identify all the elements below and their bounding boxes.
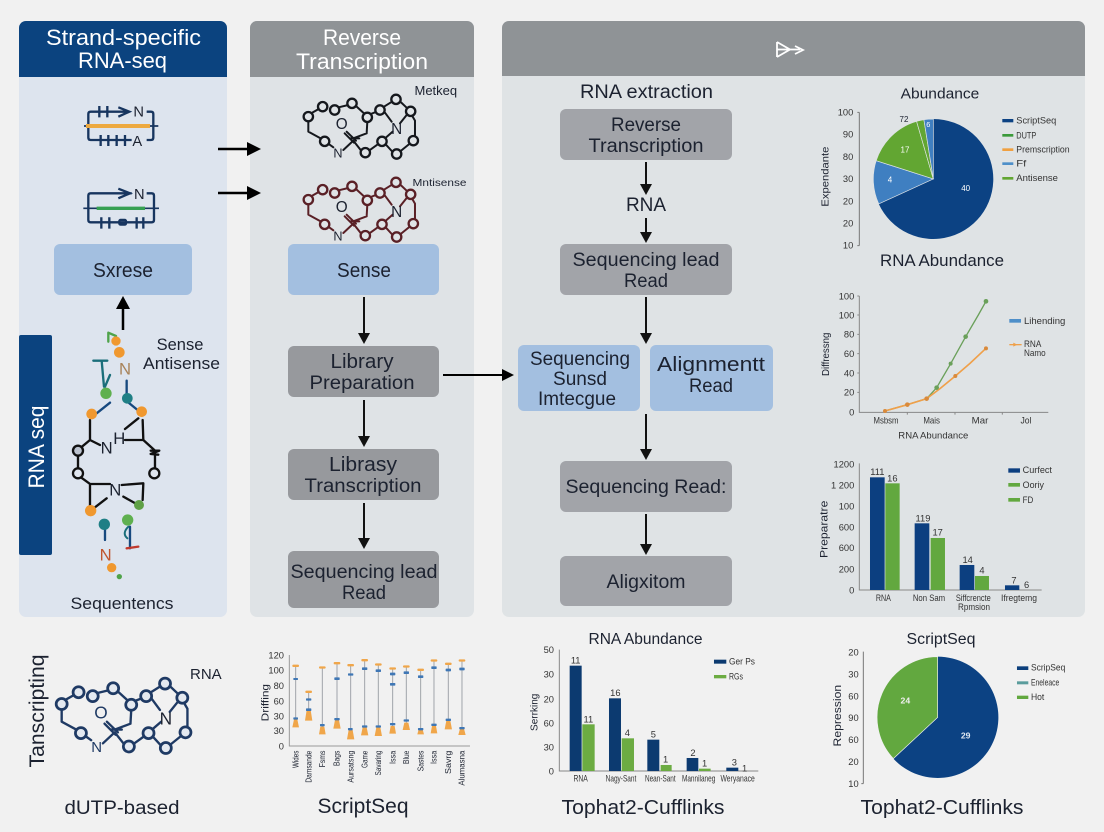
chart: preparation bar chart: 16 (887, 473, 898, 483)
chart: grouped bars: 1 (702, 759, 707, 769)
label: sense antisense (143, 336, 220, 373)
label: metkeq: Metkeq (414, 83, 457, 98)
label: Tophat2-Cufflinks: Tophat2-Cufflinks (562, 797, 724, 819)
chart: preparation bar chart: 17 (932, 528, 943, 538)
chart: range plot: Savrg (444, 751, 453, 774)
icon: sense strand diagram: N (133, 105, 144, 121)
box: sequencing sunsd integue (518, 345, 640, 411)
box: librasy transcription: Librasy (329, 454, 397, 476)
heading: ScriptSeq: ScriptSeq (906, 631, 976, 648)
chart: range plot: Alumasna (458, 750, 467, 786)
chart: preparation bar chart: 600 (839, 543, 854, 553)
chart: preparation bar chart: Ooriy (1023, 480, 1044, 490)
icon: navy ring molecule (56, 678, 191, 756)
chart: grouped bars: 0 (549, 767, 554, 777)
chart: preparation bar chart: 6 (1024, 580, 1029, 590)
arrow: reverse transcription to RNA (640, 162, 652, 195)
chart: preparation bar chart: 7 (1011, 575, 1017, 585)
chart: preparation bar chart: 111 (870, 467, 884, 477)
chart: grouped bars: 30 (544, 743, 554, 753)
label: transcripting: Tanscriptinq (26, 654, 49, 768)
box: sequencing sunsd integue: Imtecgue (538, 389, 616, 410)
label: RNA: RNA (626, 195, 666, 216)
chart: expression pie: ScripSeq (1031, 663, 1065, 673)
chart: abundance pie: 72 (900, 115, 909, 124)
chart: grouped bars: 11 (571, 656, 581, 666)
panel: reverse transcription (250, 21, 474, 617)
box: sequencing lead read (288, 551, 439, 608)
chart: preparation bar chart: Preparatre (818, 501, 830, 558)
arrow: sequencing to alignment row (640, 297, 652, 344)
chart: range plot: Game (360, 750, 369, 768)
chart: grouped bars: Ger Ps (729, 656, 755, 666)
arrow: sequencing read to alignment (640, 514, 652, 555)
chart: preparation bar chart (818, 459, 1052, 612)
chart: range plot: 30 (274, 726, 284, 736)
side tab: RNA seq (19, 335, 52, 555)
chart: preparation bar chart: 4 (979, 566, 985, 576)
chart: grouped bars: 1 (663, 755, 668, 765)
box: aligxitom (560, 556, 732, 606)
arrow: alignment row to sequencing read (640, 414, 652, 460)
heading: strand-specific RNA-seq: Strand-specific (46, 25, 201, 50)
chart: abundance pie: 4 (888, 176, 893, 185)
box: sequencing lead read: Sequencing lead (572, 250, 720, 271)
chart: grouped bars: 2 (690, 748, 696, 758)
chart: grouped bars: 1 (742, 763, 747, 773)
chart: range plot: Issa (430, 750, 439, 764)
chart: abundance pie: 20 (843, 196, 853, 206)
box: sequencing lead read: Sequencing lead (290, 562, 438, 583)
chart: line chart: Namo (1024, 348, 1046, 358)
chart: expression pie: 10 (848, 779, 859, 789)
chart: range plot: Issa (388, 750, 397, 764)
chart: expression pie (832, 648, 1065, 789)
chart: grouped bars: RGs (729, 671, 743, 681)
heading: strand-specific RNA-seq (19, 21, 227, 77)
box: librasy transcription: Transcription (304, 476, 422, 497)
chart: range plot: 100 (268, 666, 284, 676)
label: Tophat2-Cufflinks: Tophat2-Cufflinks (860, 797, 1024, 819)
heading: RNA abundance: RNA Abundance (588, 631, 702, 648)
chart: range plot: Savaring (374, 751, 383, 775)
chart: line chart: 40 (844, 368, 854, 378)
chart: range plot: 0 (279, 741, 284, 751)
icon: RNA hairpin molecule: N (101, 438, 113, 457)
icon: RNA hairpin molecule: N (119, 359, 131, 378)
box: alignment read: Read (689, 376, 733, 397)
icon: maroon ring molecule: O (336, 199, 348, 216)
icon: header glyph (777, 42, 803, 57)
label: mntisense: Mntisense (412, 177, 467, 189)
chart: preparation bar chart: RNA (876, 593, 891, 603)
chart: grouped bars: Nean-Sant (645, 773, 676, 783)
chart: preparation bar chart: 200 (839, 565, 854, 575)
chart: abundance pie: DUTP (1016, 130, 1036, 140)
chart: expression pie: 90 (848, 713, 859, 723)
arrow: RNA to sequencing (640, 218, 652, 243)
chart: line chart: Mais (923, 416, 940, 426)
box: sequencing read (560, 461, 732, 512)
chart: grouped bars: 5 (651, 729, 656, 739)
box: sequencing read: Sequencing Read: (566, 477, 726, 498)
arrow: sense to library preparation (358, 297, 370, 344)
chart: line chart: 100 (839, 291, 854, 301)
chart: grouped bars: 30 (544, 670, 554, 680)
bottom item: ScriptSeq range chart (260, 650, 470, 818)
chart: abundance pie: Premscription (1016, 144, 1070, 154)
panel: strand-specific RNA-seq (19, 21, 227, 617)
box: Sxrese: Sxrese (93, 260, 153, 282)
chart: abundance pie: 30 (843, 174, 853, 184)
chart: expression pie: Repression (832, 685, 844, 746)
box: alignment read: Alignmentt (657, 354, 765, 376)
chart: preparation bar chart: Siffcrencte (956, 593, 991, 603)
chart: preparation bar chart: 600 (839, 523, 854, 533)
chart: abundance pie (820, 86, 1070, 251)
side tab: RNA seq: RNA seq (24, 406, 49, 488)
box: sequencing lead read: Read (342, 583, 386, 604)
chart: range plot: 80 (274, 681, 284, 691)
chart: expression pie: 30 (848, 670, 859, 680)
bottom item: Tophat2-Cufflinks bar chart (530, 631, 758, 819)
chart: abundance pie: 20 (843, 219, 853, 229)
chart: line chart: Diffressng (821, 333, 832, 376)
box: reverse transcription (560, 109, 732, 160)
label: ScriptSeq: ScriptSeq (318, 795, 408, 818)
chart: range plot: Wides (291, 751, 300, 768)
heading: strand-specific RNA-seq: RNA-seq (78, 48, 167, 73)
box: library preparation: Library (330, 351, 394, 373)
icon: RNA hairpin molecule: N (100, 546, 112, 565)
chart: preparation bar chart: Curfect (1023, 465, 1052, 475)
chart: range plot: Sastes (416, 751, 425, 771)
icon: black ring molecule: O (336, 116, 348, 133)
chart: expression pie: 29 (961, 730, 971, 740)
icon: RNA hairpin molecule (73, 333, 159, 579)
chart: line chart: Msbsm (873, 416, 899, 426)
heading: reverse transcription: Reverse (323, 25, 401, 50)
chart: line chart: 0 (849, 408, 854, 418)
heading: reverse transcription (250, 21, 474, 77)
chart: abundance pie: Ff (1016, 158, 1027, 168)
box: alignment read (650, 345, 773, 411)
box: sense: Sense (337, 260, 391, 282)
box: aligxitom: Aligxitom (606, 572, 686, 593)
box: Sxrese (54, 244, 192, 295)
label: dUTP-based: dUTP-based (64, 798, 180, 819)
icon: sense strand diagram: A (132, 134, 142, 150)
chart: range plot: 60 (274, 696, 284, 706)
chart: abundance pie: Expendante (820, 146, 831, 207)
box: reverse transcription: Transcription (588, 136, 704, 157)
chart: grouped bars (530, 645, 758, 783)
chart: range plot: 30 (274, 711, 284, 721)
chart: line chart: 80 (844, 330, 854, 340)
icon: navy ring molecule: O (94, 703, 108, 723)
label: sense antisense: Sense (157, 336, 203, 354)
arrow: up to Sxrese (116, 296, 130, 330)
arrow: top panel link one (218, 142, 261, 156)
box: librasy transcription (288, 449, 439, 500)
chart: line chart: Lihending (1024, 316, 1065, 326)
box: reverse transcription: Reverse (611, 115, 681, 136)
icon: black ring molecule: N (333, 146, 343, 160)
label: sequentencs: Sequentencs (70, 594, 174, 613)
chart: preparation bar chart: Ifregtemg (1001, 593, 1037, 603)
chart: line chart (821, 291, 1065, 440)
box: sequencing sunsd integue: Sunsd (553, 369, 607, 390)
chart: line chart: Jol (1020, 416, 1031, 426)
chart: grouped bars: Serrking (530, 694, 541, 731)
chart: preparation bar chart: 14 (962, 555, 973, 565)
chart: grouped bars: 11 (583, 714, 593, 724)
chart: preparation bar chart: 1 200 (831, 480, 854, 490)
heading: reverse transcription: Transcription (296, 49, 428, 74)
icon: antisense strand diagram (83, 187, 159, 229)
icon: navy ring molecule: N (160, 708, 172, 728)
chart: expression pie: Eneleace (1031, 677, 1059, 687)
chart: grouped bars: RNA (573, 773, 588, 783)
chart: grouped bars: 4 (625, 728, 630, 738)
chart: range plot: Blue (402, 750, 411, 764)
icon: RNA hairpin molecule: N (109, 481, 121, 500)
box: sequencing lead read (560, 244, 732, 295)
chart: grouped bars: 50 (544, 645, 554, 655)
chart: preparation bar chart: 0 (849, 586, 854, 596)
chart: preparation bar chart: FD (1023, 495, 1034, 505)
icon: maroon ring molecule: N (391, 204, 402, 221)
chart: grouped bars: 60 (544, 718, 554, 728)
chart: abundance pie: 90 (843, 130, 853, 140)
chart: grouped bars: 3 (732, 758, 737, 768)
chart: abundance pie: 17 (901, 145, 910, 154)
box: library preparation: Preparation (310, 373, 414, 394)
chart: range plot: Bags (333, 751, 342, 766)
chart: preparation bar chart: 1200 (834, 459, 854, 469)
icon: black ring molecule (304, 95, 418, 160)
chart: expression pie: 60 (848, 692, 859, 702)
box: sense (288, 244, 439, 295)
chart: abundance pie: Antisense (1016, 173, 1058, 183)
chart: abundance pie: 10 (843, 241, 853, 251)
chart: grouped bars: Mannilaneg (682, 773, 715, 783)
chart: preparation bar chart: Non Sam (913, 593, 945, 603)
chart: range plot: Fsms (318, 751, 327, 767)
chart: expression pie: 20 (848, 757, 859, 767)
chart: range plot: Damsande (304, 750, 313, 783)
chart: expression pie: 20 (848, 648, 859, 658)
chart: abundance pie: 40 (961, 184, 971, 193)
label: RNA: RNA (190, 666, 222, 683)
chart: line chart: 20 (844, 388, 854, 398)
chart: range plot (260, 650, 470, 786)
chart: line chart: RNA (1024, 339, 1042, 349)
chart: range plot: Driffing (260, 684, 271, 721)
chart: preparation bar chart: Rpmsion (958, 602, 990, 612)
chart: grouped bars: 16 (610, 688, 621, 698)
heading: RNA extraction: RNA extraction (580, 82, 713, 103)
icon: maroon ring molecule (304, 178, 418, 243)
chart: line chart: 60 (844, 349, 854, 359)
chart: abundance pie: 80 (843, 152, 853, 162)
chart: grouped bars: Nagy-Sant (606, 773, 637, 783)
icon: antisense strand diagram: N (134, 187, 145, 203)
box: library preparation (288, 346, 439, 397)
bottom item: dUTP-based (26, 654, 222, 819)
heading: RNA abundance: RNA Abundance (880, 251, 1004, 270)
chart: expression pie: Hot (1031, 692, 1045, 702)
chart: abundance pie: ScriptSeq (1016, 116, 1056, 126)
chart: line chart: RNA Abundance (898, 430, 968, 440)
box: sequencing sunsd integue: Sequencing (530, 349, 630, 370)
chart: expression pie: 24 (901, 696, 910, 706)
chart: expression pie: 60 (848, 735, 859, 745)
heading band: workflow (502, 21, 1085, 76)
chart: abundance pie: 100 (838, 108, 853, 118)
arrow: library transcription to sequencing (358, 503, 370, 549)
box: sequencing lead read: Read (624, 271, 668, 292)
icon: RNA hairpin molecule: H (113, 429, 125, 448)
bottom item: ScriptSeq pie chart (832, 631, 1065, 819)
arrow: top panel link two (218, 186, 261, 200)
chart: preparation bar chart: 100 (839, 502, 854, 512)
chart: grouped bars: 20 (544, 694, 554, 704)
chart: range plot: Aursatsng (346, 751, 355, 783)
chart: abundance pie: Abundance (901, 86, 979, 102)
chart: line chart: 100 (839, 310, 854, 320)
arrow: library preparation to library transcription (358, 400, 370, 447)
icon: sense strand diagram (84, 105, 158, 150)
icon: navy ring molecule: N (91, 739, 102, 756)
chart: line chart: Mar (972, 416, 988, 426)
panel: workflow and charts (502, 21, 1085, 617)
chart: grouped bars: Weryanace (720, 773, 755, 783)
chart: abundance pie: 6 (926, 120, 930, 129)
icon: black ring molecule: N (391, 121, 402, 138)
chart: preparation bar chart: 119 (916, 513, 930, 523)
chart: range plot: 120 (268, 650, 284, 660)
label: sense antisense: Antisense (143, 355, 220, 373)
icon: maroon ring molecule: N (333, 229, 343, 243)
arrow: library preparation to sequencing (443, 369, 514, 381)
